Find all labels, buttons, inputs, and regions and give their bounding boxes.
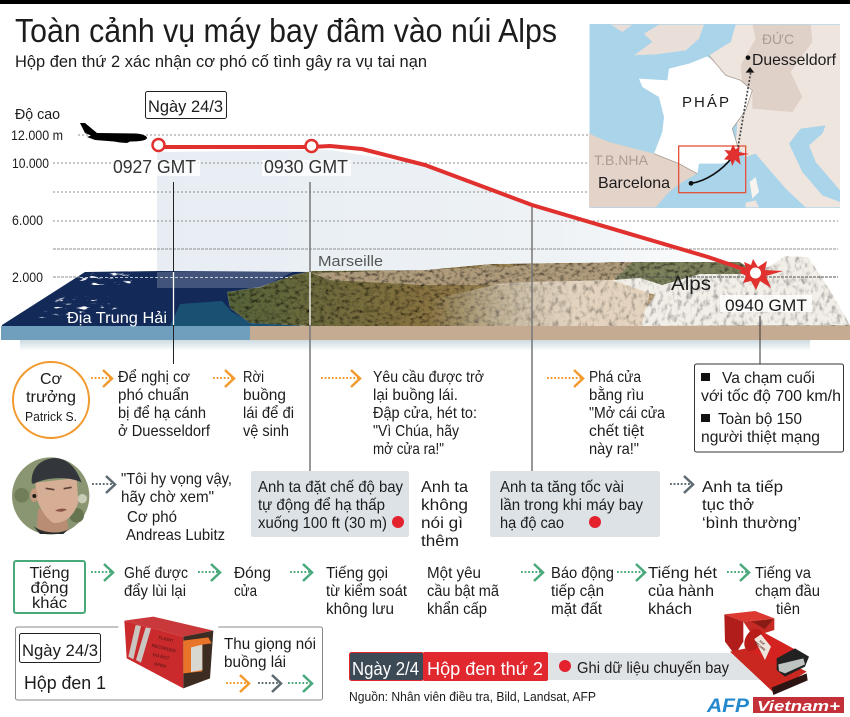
altitude grid lines and axis [11, 107, 838, 285]
captain step 2: vệ sinh [243, 423, 289, 440]
altitude grid lines and axis: 2.000 [12, 270, 43, 285]
subtitle: Hộp đen thứ 2 xác nhận cơ phó cố tình gây ra vụ tai nạn [15, 52, 427, 71]
sound: first impact: chạm đầu [755, 583, 820, 600]
date tag: 24/3: Ngày 24/3 [148, 97, 223, 116]
captain step 3: Yêu cầu được trở [373, 369, 484, 386]
icon: red flight data recorder: RECORD [754, 641, 767, 652]
sound: ground alarm: mặt đất [551, 601, 603, 618]
captain step 2: lái để đi [243, 404, 294, 422]
leader lines [174, 182, 760, 471]
sound: air traffic control: không lưu [326, 601, 394, 618]
time label 0927: 0927 GMT [113, 157, 196, 177]
grey box: autopilot: tự động để hạ thấp [258, 496, 385, 514]
captain step 4: "Mở cái cửa [589, 405, 665, 422]
callout: final impact: Va chạm cuối [722, 370, 815, 387]
altitude grid lines and axis: Độ cao [15, 107, 60, 123]
text: breathing normally [702, 479, 801, 532]
logo: Vietnam+: Vietnam+ [757, 698, 840, 715]
co-pilot quote: Andreas Lubitz [126, 527, 225, 544]
co-pilot quote: hãy chờ xem" [121, 489, 214, 506]
icon: red flight data recorder: SOF [758, 639, 766, 646]
sound: air traffic control [326, 565, 408, 618]
sound: door: cửa [234, 583, 257, 600]
olive ridge [612, 262, 755, 290]
sound: seat [124, 565, 188, 600]
sound: first impact [755, 565, 820, 618]
callout: final impact: với tốc độ 700 km/h [701, 388, 841, 405]
crash marker and time 0940 [720, 259, 812, 315]
grey box: accelerates: Anh ta tăng tốc vài [500, 479, 624, 496]
logo: Vietnam+ [753, 697, 844, 715]
other sounds label: Tiếng [30, 565, 70, 582]
green arrows [91, 564, 749, 581]
terrain illustration [2, 256, 850, 326]
icon: airplane [80, 123, 147, 143]
sound: first impact: Tiếng va [755, 565, 811, 582]
locator map: Barcelona [598, 175, 670, 192]
captain step 3: "Vì Chúa, hãy [373, 423, 459, 440]
brown upper ridge [312, 262, 640, 285]
time label 0927 [111, 139, 200, 177]
other sounds label [14, 561, 85, 613]
text: says nothing more: Anh ta [421, 479, 468, 496]
ground band: sea and land [1, 326, 850, 351]
co-pilot quote: "Tôi hy vọng vậy, [121, 471, 232, 488]
sound: ground alarm: Báo động [551, 565, 614, 582]
text: says nothing more: không [421, 497, 468, 514]
sound: ground alarm [551, 565, 614, 618]
second box banner: Ngày 2/4 [352, 659, 419, 679]
captain step 4: chết tiệt [589, 423, 645, 440]
sound: passengers scream [648, 565, 718, 618]
flight path [158, 146, 755, 273]
callout: final impact [694, 364, 844, 452]
co-pilot quote: Cơ phó [127, 509, 177, 526]
text: says nothing more: thêm [421, 533, 459, 550]
grey box: accelerates [490, 471, 660, 537]
terrain labels: Alps [671, 274, 711, 295]
captain step 1: ở Duesseldorf [118, 423, 211, 440]
locator map: PHÁP [682, 94, 729, 111]
second box banner [350, 652, 772, 681]
locator map: Duesseldorf [752, 52, 837, 69]
text: says nothing more [421, 479, 468, 550]
sound: emergency code: cầu bật mã [427, 583, 499, 600]
time label 0930 [262, 140, 351, 177]
captain step 2 [243, 369, 294, 440]
dashed line 2000 m [53, 276, 838, 278]
captain step 2: buồng [243, 387, 286, 404]
callout: final impact: người thiệt mạng [701, 429, 820, 446]
icon: red flight data recorder [724, 611, 809, 695]
portrait: co-pilot [12, 457, 89, 535]
captain step 3: Đập cửa, hét to: [373, 405, 477, 422]
captain row arrows [91, 370, 583, 387]
source: Nguồn: Nhân viên điều tra, Bild, Landsat, AFP [349, 690, 596, 704]
icon: red black box 1: DO NOT [152, 652, 170, 661]
other sounds label: khác [32, 595, 67, 612]
captain step 3 [373, 369, 484, 458]
icon: red black box 1: FLIGHT [158, 635, 175, 644]
text: says nothing more: nói gì [421, 515, 463, 532]
altitude grid lines and axis: 6.000 [12, 213, 43, 228]
top black bar [0, 0, 850, 4]
terrain labels [67, 253, 711, 327]
callout: final impact: Toàn bộ 150 [718, 411, 802, 428]
sound: air traffic control: Tiếng gọi [326, 565, 388, 582]
captain step 3: lại buồng lái. [373, 387, 458, 404]
locator map: T.B.NHA [594, 152, 649, 168]
captain step 4: bằng rìu [589, 385, 644, 404]
captain step 4: Phá cửa [589, 369, 641, 386]
altitude grid lines and axis: 10.000 [12, 156, 49, 171]
logo: AFP: AFP [706, 696, 749, 717]
second box banner: Hộp đen thứ 2 [427, 659, 543, 679]
locator map [589, 24, 840, 208]
captain badge: Cơ [40, 371, 63, 388]
panel: black box 1: Hộp đen 1 [24, 673, 106, 693]
sound: passengers scream: Tiếng hét [648, 565, 718, 582]
crash marker and time 0940: 0940 GMT [725, 296, 807, 315]
panel: black box 1: Ngày 24/3 [22, 641, 98, 660]
icon: red black box 1 [118, 617, 218, 688]
sound: emergency code [427, 565, 499, 618]
text: breathing normally: Anh ta tiếp [702, 479, 783, 496]
land [227, 262, 850, 326]
sound: first impact: tiên [776, 601, 800, 618]
captain badge: trưởng [26, 389, 76, 406]
text: breathing normally: ‘bình thường’ [702, 515, 801, 532]
sound: emergency code: khẩn cấp [427, 600, 487, 618]
sound: ground alarm: tiếp cận [551, 583, 604, 600]
captain step 1 [118, 368, 211, 440]
terrain labels: Địa Trung Hải [67, 310, 167, 327]
grey box: autopilot: Anh ta đặt chế độ bay [258, 479, 403, 496]
second box banner: Ghi dữ liệu chuyến bay [577, 660, 729, 677]
captain step 3: mở cửa ra!" [373, 441, 444, 458]
sound: emergency code: Một yêu [427, 565, 481, 582]
pale foothills [430, 280, 650, 326]
sound: door: Đóng [234, 565, 271, 582]
sea surface [2, 271, 312, 326]
captain step 1: Để nghị cơ [118, 368, 190, 386]
captain step 4: này ra!" [589, 441, 639, 458]
co-pilot quote arrow [92, 476, 115, 493]
grey box: accelerates: hạ độ cao [500, 515, 564, 532]
grey arrow to breathing [670, 476, 693, 493]
grey box: autopilot: xuống 100 ft (30 m) [258, 515, 387, 532]
panel: black box 1 [16, 627, 322, 700]
sound: passengers scream: của hành [648, 583, 714, 600]
altitude chart background panel [157, 150, 770, 272]
icon: red black box 1: OPEN [153, 661, 167, 669]
grey box: autopilot [251, 471, 409, 537]
title: Toàn cảnh vụ máy bay đâm vào núi Alps [15, 12, 557, 49]
captain step 2: Rời [243, 369, 264, 386]
sound: door [234, 565, 271, 600]
captain step 1: bị để hạ cánh [118, 404, 206, 422]
other sounds label: động [30, 580, 68, 597]
terrain labels: Marseille [318, 253, 383, 270]
sound: seat: đẩy lùi lại [124, 582, 186, 600]
panel: black box 1: buồng lái [224, 654, 286, 671]
captain step 1: phó chuẩn [118, 386, 189, 404]
panel: black box 1: Thu giọng nói [224, 636, 316, 653]
co-pilot quote [121, 471, 232, 544]
sound: seat: Ghế được [124, 565, 188, 582]
altitude grid lines and axis: 12.000 m [11, 128, 63, 143]
captain badge [13, 362, 89, 438]
text: breathing normally: tục thở [702, 497, 755, 514]
translucent panel over sea [157, 272, 293, 288]
sound: air traffic control: từ kiểm soát [326, 582, 408, 600]
locator map: ĐỨC [762, 31, 794, 47]
time label 0930: 0930 GMT [264, 157, 348, 177]
captain step 4 [589, 369, 665, 458]
icon: red black box 1: RECORDER [151, 643, 177, 654]
captain badge: Patrick S. [25, 409, 77, 424]
sound: passengers scream: khách [648, 601, 692, 618]
date tag: 24/3 [146, 92, 226, 118]
grey box: accelerates: lần trong khi máy bay [500, 497, 643, 514]
snowy Alps [612, 256, 850, 326]
